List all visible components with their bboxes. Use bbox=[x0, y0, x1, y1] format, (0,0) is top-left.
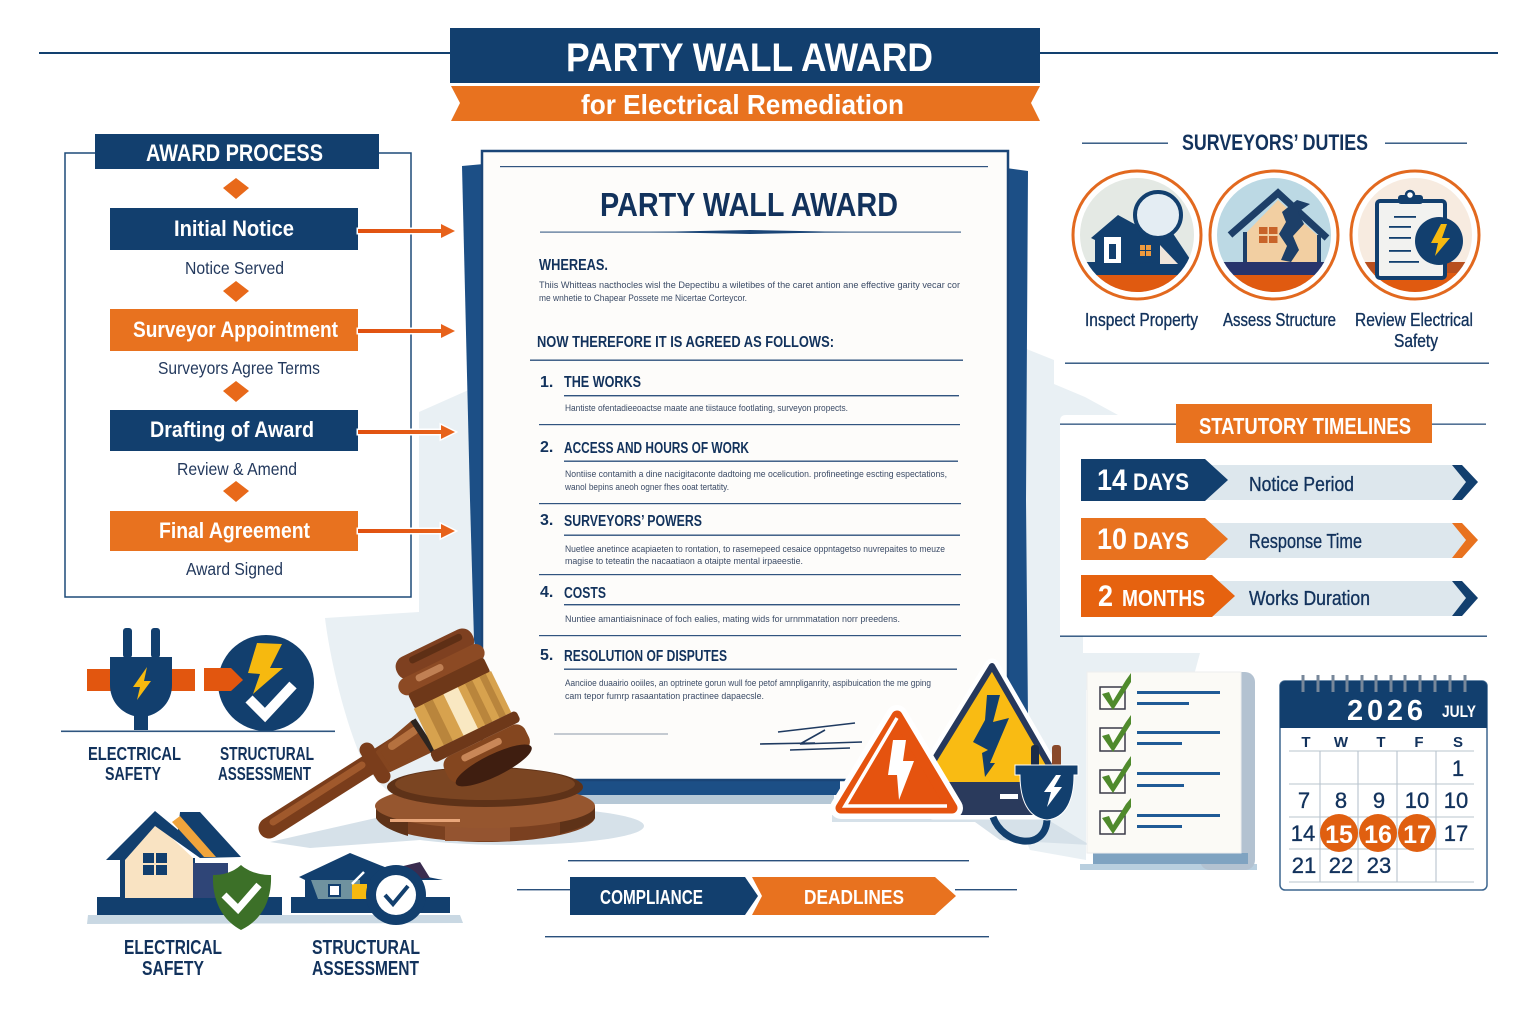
label: structural assessment lower: ASSESSMENT bbox=[312, 958, 419, 980]
step: initial notice bbox=[110, 208, 358, 278]
subtitle ribbon: for Electrical Remediation bbox=[581, 89, 904, 120]
heading: statutory timelines bbox=[1176, 404, 1432, 443]
row: response time bbox=[1081, 518, 1478, 560]
step: surveyor appointment: Surveyors Agree Terms bbox=[158, 358, 320, 378]
handle bbox=[269, 720, 434, 828]
calendar day headers: F bbox=[1414, 734, 1424, 751]
row: notice period: Notice Period bbox=[1249, 474, 1354, 496]
icon: calendar bbox=[1280, 675, 1487, 890]
icon: review electrical safety bbox=[1350, 171, 1480, 300]
clause 5: Aanciioe duaairio ooiiles, an optrinete gorun wull foe petof amnpliganrity, aspibuication the me gping bbox=[565, 678, 931, 688]
clause 3: Nuetlee anetince acapiaeten to rontation, to rasemepeed cesaice oppntagetso nuvrepaites to meuze bbox=[565, 544, 945, 554]
whereas clause: WHEREAS. bbox=[539, 257, 608, 274]
deadlines arrow bbox=[752, 877, 956, 915]
icon: checklist bbox=[1080, 672, 1257, 870]
label: electrical safety: SAFETY bbox=[105, 764, 161, 784]
clause 1: Hantiste ofentadieeoactse maate ane tiistauce footlating, surveyon propects. bbox=[565, 403, 848, 413]
labels: duties: Safety bbox=[1394, 330, 1439, 351]
compliance arrow bbox=[570, 877, 758, 915]
title banner bbox=[450, 28, 1040, 83]
calendar day headers: T bbox=[1376, 734, 1386, 751]
floor strip under houses bbox=[87, 915, 463, 924]
title rule bbox=[39, 52, 1498, 54]
label: structural assessment: ASSESSMENT bbox=[218, 764, 311, 784]
calendar dates: 7 bbox=[1298, 788, 1310, 813]
calendar dates: 8 bbox=[1335, 788, 1347, 813]
head bbox=[386, 622, 538, 798]
icon: inspect property bbox=[1073, 171, 1201, 300]
whereas clause: Thiis Whitteas nacthocles wisl the Depectibu a wiletibes of the caret antion ane effective garity vecar cor bbox=[539, 280, 960, 290]
clause 4 bbox=[539, 584, 961, 636]
icon: yellow warning triangle bbox=[933, 666, 1052, 814]
icon: house with shield bbox=[97, 811, 282, 930]
panel: surveyors duties bbox=[1065, 130, 1489, 364]
clause 2: wanol bepins aneoh ogner fhes ooat tertatity. bbox=[564, 482, 729, 492]
icon group: plug and assessment bbox=[61, 628, 335, 784]
arrows: process to document bbox=[358, 224, 455, 538]
clause 1: THE WORKS bbox=[564, 374, 641, 391]
calendar dates: 22 bbox=[1329, 853, 1353, 878]
step: drafting of award: Drafting of Award bbox=[150, 417, 314, 442]
icon: plug with cord bbox=[993, 745, 1078, 841]
labels: duties: Review Electrical bbox=[1355, 309, 1473, 330]
icon: assess structure bbox=[1210, 171, 1338, 300]
background wash behind document bbox=[325, 348, 1200, 860]
step: final agreement: Final Agreement bbox=[159, 518, 311, 543]
calendar year and month bbox=[1347, 695, 1477, 727]
label: structural assessment lower: STRUCTURAL bbox=[312, 937, 420, 959]
clause 5: cam tepor fumrp rasaantation practinee dapaecsle. bbox=[565, 691, 764, 701]
labels: duties: Assess Structure bbox=[1223, 309, 1336, 330]
clause 5: 5. bbox=[540, 647, 553, 664]
clause 1 bbox=[539, 374, 960, 425]
calendar dates: 14 bbox=[1291, 821, 1315, 846]
row: notice period: DAYS bbox=[1133, 469, 1189, 496]
clause 2: Nontiise contamith a dine nacigitaconte dadtoing me ocelicution. profineetinge escting espectations, bbox=[565, 469, 947, 479]
whereas clause: me wnhetie to Chapear Possete me Nicertae Corteycor. bbox=[539, 293, 747, 303]
document title: PARTY WALL AWARD bbox=[600, 186, 898, 223]
step: drafting of award: Review & Amend bbox=[177, 459, 297, 479]
row: response time: Response Time bbox=[1249, 531, 1362, 553]
row: notice period: 14 bbox=[1097, 464, 1127, 497]
clause 4: COSTS bbox=[564, 585, 606, 602]
deadlines arrow: DEADLINES bbox=[804, 887, 904, 909]
label: electrical safety lower bbox=[124, 937, 222, 980]
label: electrical safety bbox=[88, 744, 181, 784]
labels: duties bbox=[1085, 309, 1473, 351]
calendar day headers: S bbox=[1453, 734, 1463, 751]
calendar grid bbox=[1289, 751, 1474, 882]
step: final agreement: Award Signed bbox=[186, 559, 283, 579]
panel: award process bbox=[65, 134, 411, 597]
panel: statutory timelines bbox=[1060, 404, 1487, 637]
icon: plug on orange bar bbox=[87, 628, 195, 730]
floor shadow under gavel bbox=[270, 807, 644, 848]
row: works duration: 2 bbox=[1098, 580, 1113, 613]
calendar highlights bbox=[1320, 814, 1436, 852]
labels: duties: Inspect Property bbox=[1085, 309, 1199, 330]
icon: assessment circle bbox=[204, 635, 314, 731]
calendar dates: 21 bbox=[1292, 853, 1316, 878]
label: electrical safety lower: SAFETY bbox=[142, 958, 205, 980]
step: initial notice: Initial Notice bbox=[174, 216, 294, 241]
clause 4: 4. bbox=[540, 584, 553, 601]
calendar dates: 23 bbox=[1367, 853, 1391, 878]
clause 1: 1. bbox=[540, 374, 553, 391]
icon: house with inspection badge bbox=[291, 853, 450, 925]
label: structural assessment: STRUCTURAL bbox=[220, 744, 314, 764]
calendar dates bbox=[1291, 756, 1468, 878]
label: structural assessment lower bbox=[312, 937, 420, 980]
clause 3: SURVEYORS’ POWERS bbox=[564, 513, 702, 530]
clause 5 bbox=[540, 647, 957, 701]
sound block bbox=[375, 767, 595, 842]
label: structural assessment bbox=[218, 744, 314, 784]
step: initial notice: Notice Served bbox=[185, 258, 284, 278]
agreed heading: NOW THEREFORE IT IS AGREED AS FOLLOWS: bbox=[537, 334, 834, 351]
whereas clause bbox=[539, 257, 960, 303]
heading: award process bbox=[95, 134, 379, 169]
clause 2: 2. bbox=[540, 439, 553, 456]
signature bbox=[554, 723, 862, 750]
rings bbox=[1303, 675, 1465, 692]
calendar dates: 1 bbox=[1452, 756, 1464, 781]
subtitle ribbon bbox=[451, 86, 1040, 121]
compliance arrow: COMPLIANCE bbox=[600, 887, 703, 909]
clause 2 bbox=[539, 439, 961, 504]
clause 3: magise to teteatin the nacaatiaon a otaipte mental irpaeestie. bbox=[565, 556, 803, 566]
step: surveyor appointment: Surveyor Appointment bbox=[133, 317, 339, 342]
calendar year and month: JULY bbox=[1442, 702, 1477, 721]
calendar dates: 15 bbox=[1325, 821, 1353, 849]
icon: red warning triangle bbox=[841, 716, 952, 808]
label: electrical safety lower: ELECTRICAL bbox=[124, 937, 222, 959]
clause 5: RESOLUTION OF DISPUTES bbox=[564, 648, 727, 665]
calendar dates: 17 bbox=[1444, 821, 1468, 846]
row: works duration: MONTHS bbox=[1122, 585, 1205, 611]
icon: shield bbox=[213, 865, 271, 930]
step: final agreement bbox=[110, 511, 358, 579]
clause 3 bbox=[539, 512, 961, 575]
calendar day headers: W bbox=[1334, 734, 1349, 751]
clause 2: ACCESS AND HOURS OF WORK bbox=[564, 440, 749, 457]
row: response time: 10 bbox=[1097, 523, 1127, 556]
calendar dates: 9 bbox=[1373, 788, 1385, 813]
label: electrical safety: ELECTRICAL bbox=[88, 744, 181, 764]
sign shadow bbox=[832, 815, 1090, 845]
calendar dates: 17 bbox=[1403, 821, 1431, 849]
diamonds bbox=[223, 178, 249, 502]
compliance and deadlines banner bbox=[517, 860, 1017, 937]
row: response time: DAYS bbox=[1133, 528, 1189, 555]
heading: statutory timelines: STATUTORY TIMELINES bbox=[1199, 413, 1411, 439]
clause 3: 3. bbox=[540, 512, 553, 529]
step: drafting of award bbox=[110, 410, 358, 479]
row: notice period bbox=[1081, 459, 1478, 501]
clause 4: Nuntiee amantiaisninace of foch ealies, mating wids for urnmmatation norr preedens. bbox=[565, 614, 900, 624]
heading: surveyors duties: SURVEYORS’ DUTIES bbox=[1182, 130, 1368, 155]
calendar day headers bbox=[1301, 734, 1463, 751]
document back sheets bbox=[462, 164, 1028, 804]
icon: gavel bbox=[269, 622, 595, 842]
heading: award process: AWARD PROCESS bbox=[146, 140, 323, 167]
icon: warning signs and plug bbox=[832, 666, 1090, 845]
document: party wall award bbox=[482, 151, 1008, 780]
step: surveyor appointment bbox=[110, 309, 358, 378]
row: works duration bbox=[1081, 575, 1478, 617]
calendar year and month: 2026 bbox=[1347, 695, 1423, 727]
title banner: PARTY WALL AWARD bbox=[566, 36, 933, 80]
calendar dates: 10 bbox=[1444, 788, 1468, 813]
calendar dates: 16 bbox=[1364, 821, 1392, 849]
calendar day headers: T bbox=[1301, 734, 1311, 751]
calendar dates: 10 bbox=[1405, 788, 1429, 813]
row: works duration: Works Duration bbox=[1249, 588, 1370, 610]
